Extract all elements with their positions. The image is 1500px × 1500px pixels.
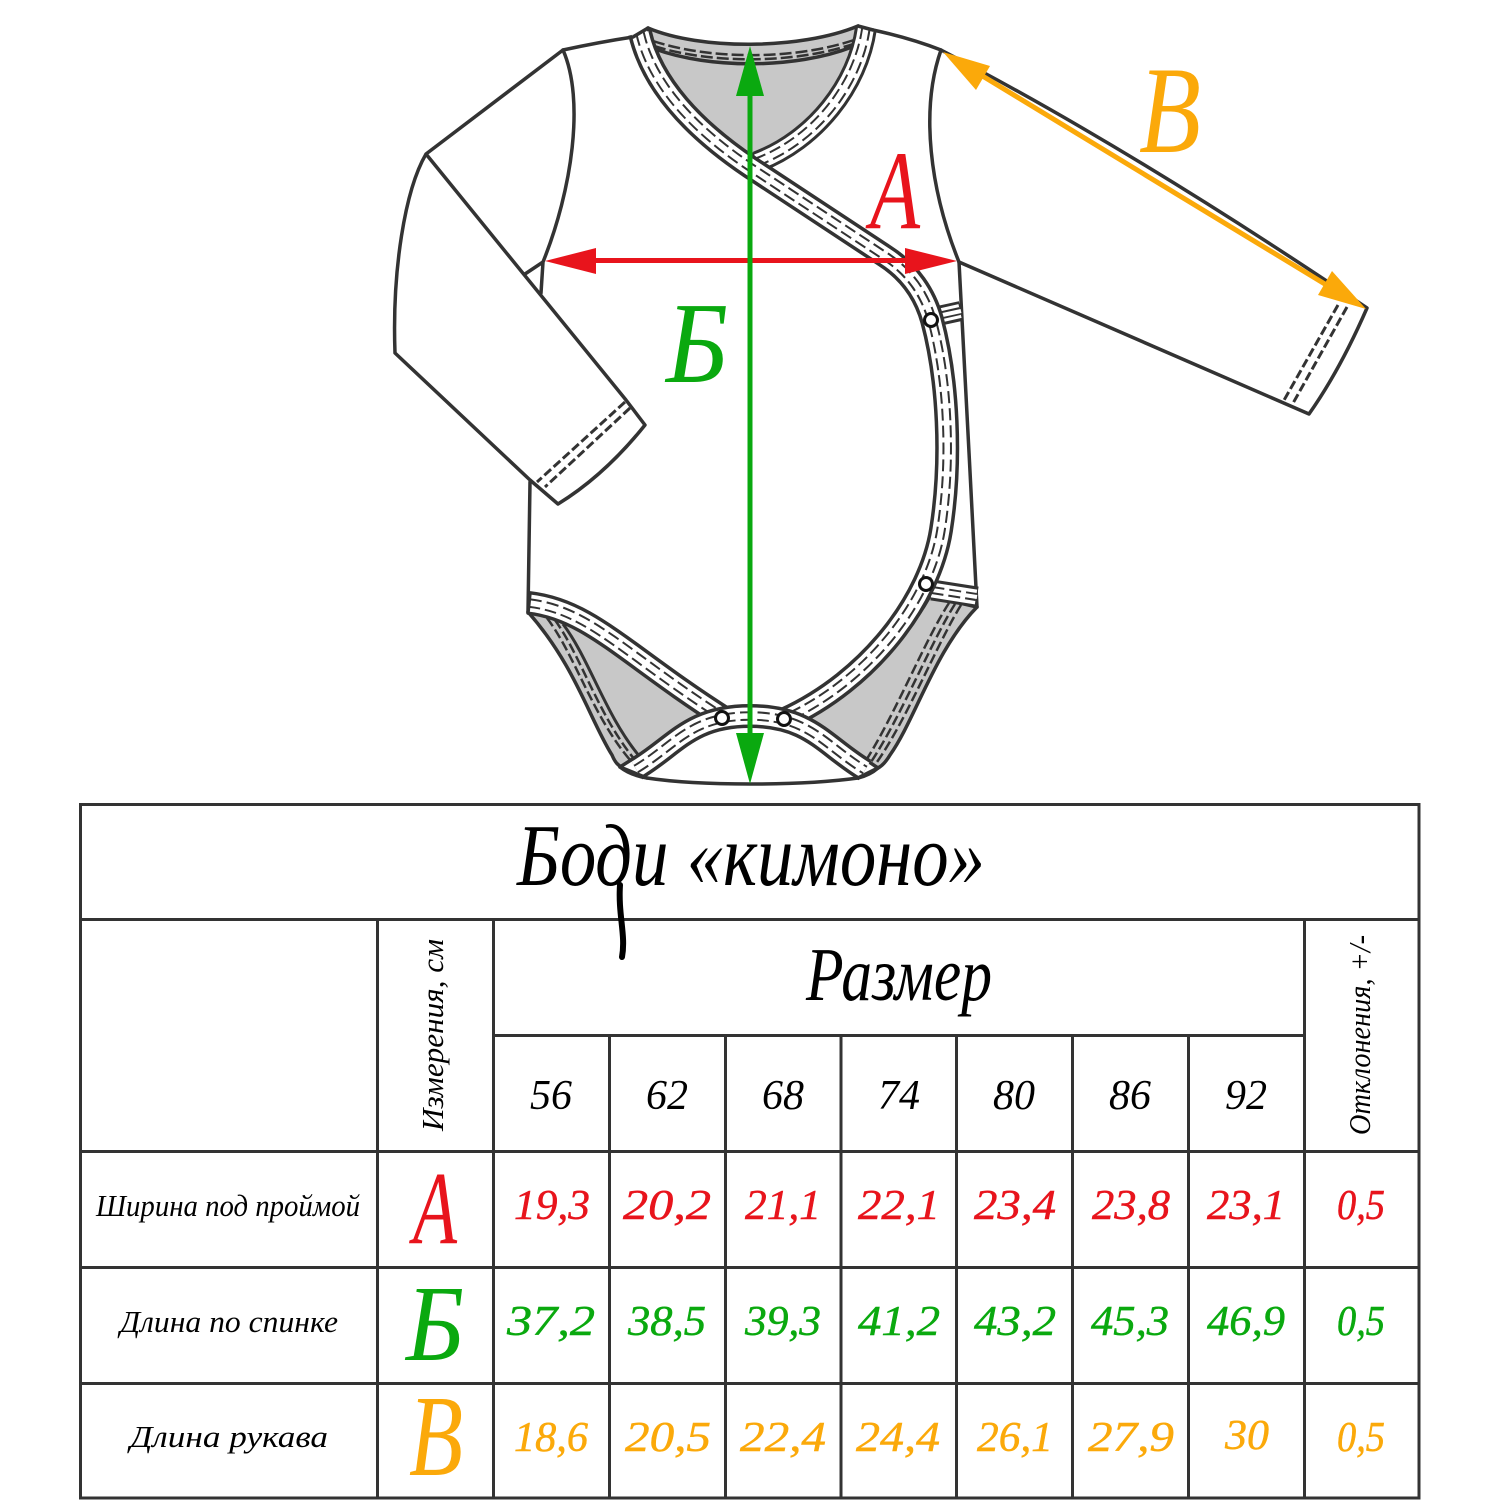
garment: long-sleeve kimono bodysuit — [395, 26, 1367, 784]
size numbers: 74 — [878, 1073, 920, 1119]
row: sleeve length: 20,5 — [625, 1415, 711, 1461]
row: sleeve length: 22,4 — [740, 1415, 826, 1461]
left sleeve — [395, 50, 645, 504]
title flourish — [620, 885, 623, 957]
leg band: left — [529, 603, 726, 719]
row: back length: 43,2 — [974, 1299, 1056, 1345]
neck band: right — [757, 28, 866, 162]
body outline — [525, 30, 977, 612]
row: width under armhole: А — [409, 1151, 457, 1266]
row: width under armhole: Ширина под проймой — [95, 1188, 360, 1223]
row: sleeve length: 24,4 — [856, 1415, 940, 1461]
row: width under armhole — [95, 1151, 1385, 1266]
size numbers: 62 — [646, 1073, 688, 1119]
snap buttons — [716, 314, 938, 726]
row: back length: 45,3 — [1091, 1299, 1169, 1345]
neck back seam — [653, 40, 854, 64]
row: sleeve length: 27,9 — [1088, 1415, 1174, 1461]
row: sleeve length: 30 — [1224, 1413, 1269, 1459]
right sleeve — [941, 50, 1367, 414]
arrow: B sleeve length (orange) — [943, 52, 1366, 309]
size numbers: 86 — [1109, 1073, 1151, 1119]
row: width under armhole: 21,1 — [745, 1183, 821, 1229]
row: width under armhole: 23,4 — [974, 1183, 1056, 1229]
table title: Боди «кимоно» — [515, 808, 985, 905]
table grid — [80, 804, 1419, 1498]
row: back length: 41,2 — [858, 1299, 940, 1345]
heading: measurements: Измерения, см — [415, 939, 450, 1132]
size numbers: 92 — [1225, 1073, 1267, 1119]
label: A on garment: А — [865, 129, 920, 253]
row: sleeve length: В — [409, 1373, 463, 1500]
row: width under armhole: 0,5 — [1337, 1183, 1385, 1229]
row: sleeve length: 26,1 — [977, 1415, 1053, 1461]
row: sleeve length: Длина рукава — [127, 1419, 328, 1454]
row: width under armhole: 23,8 — [1092, 1183, 1170, 1229]
size numbers — [530, 1073, 1267, 1119]
row: back length: 38,5 — [627, 1299, 706, 1345]
gusset seam: right — [865, 603, 961, 762]
row: sleeve length: 0,5 — [1337, 1415, 1385, 1461]
size numbers: 68 — [762, 1073, 804, 1119]
arrow: Б length (green) — [736, 46, 764, 784]
row: width under armhole: 19,3 — [514, 1183, 590, 1229]
row: back length: 46,9 — [1207, 1299, 1285, 1345]
row: sleeve length — [127, 1373, 1385, 1500]
row: back length: 37,2 — [506, 1299, 595, 1345]
label: Б on garment: Б — [664, 280, 728, 408]
crotch band — [636, 716, 865, 770]
side tab: upper — [938, 311, 961, 316]
size table — [80, 804, 1419, 1500]
row: back length — [117, 1265, 1385, 1384]
row: back length: 0,5 — [1337, 1299, 1385, 1345]
gusset: right — [785, 596, 977, 768]
size numbers: 56 — [530, 1073, 572, 1119]
gusset: left — [528, 612, 722, 767]
row: width under armhole: 23,1 — [1207, 1183, 1285, 1229]
heading: size: Размер — [805, 933, 992, 1017]
row: back length: 39,3 — [744, 1299, 821, 1345]
gusset seam: left — [547, 618, 640, 760]
row: width under armhole: 22,1 — [858, 1183, 940, 1229]
row: sleeve length: 18,6 — [514, 1415, 588, 1461]
neck gray inner — [648, 26, 858, 155]
band end caps — [528, 26, 878, 778]
wrap band: main front — [640, 33, 947, 719]
row: back length: Б — [404, 1265, 464, 1384]
heading: deviation: Отклонения, +/- — [1342, 935, 1377, 1135]
side tab: lower — [932, 590, 977, 597]
arrow: A width (red) — [545, 248, 957, 274]
row: width under armhole: 20,2 — [623, 1183, 711, 1229]
size numbers: 80 — [993, 1073, 1035, 1119]
crotch opening — [620, 725, 878, 784]
row: back length: Длина по спинке — [117, 1304, 338, 1339]
label: В on garment: В — [1139, 42, 1201, 179]
